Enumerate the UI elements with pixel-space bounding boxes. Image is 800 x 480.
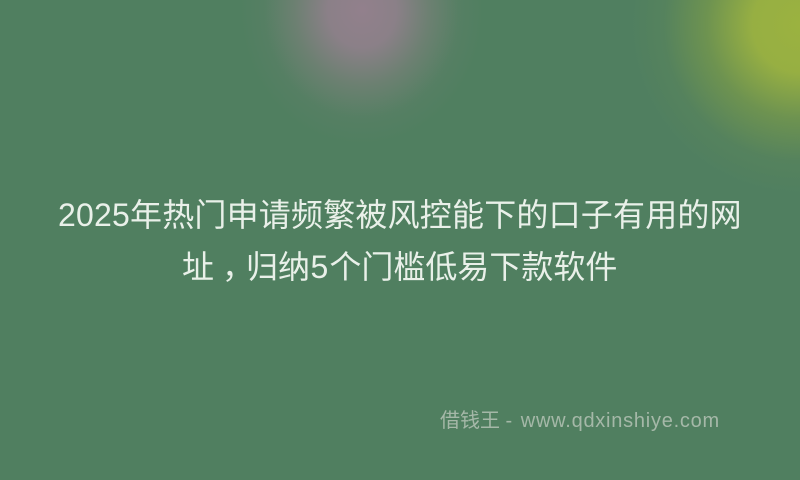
decorative glow: mauve top centre <box>240 0 484 145</box>
site watermark: 借钱王 - www.qdxinshiye.com <box>440 410 720 432</box>
title line 2: 址，归纳5个门槛低易下款软件 <box>182 249 617 285</box>
decorative glow: yellow-green top right <box>630 0 800 195</box>
title line 1: 2025年热门申请频繁被风控能下的口子有用的网 <box>58 197 742 233</box>
